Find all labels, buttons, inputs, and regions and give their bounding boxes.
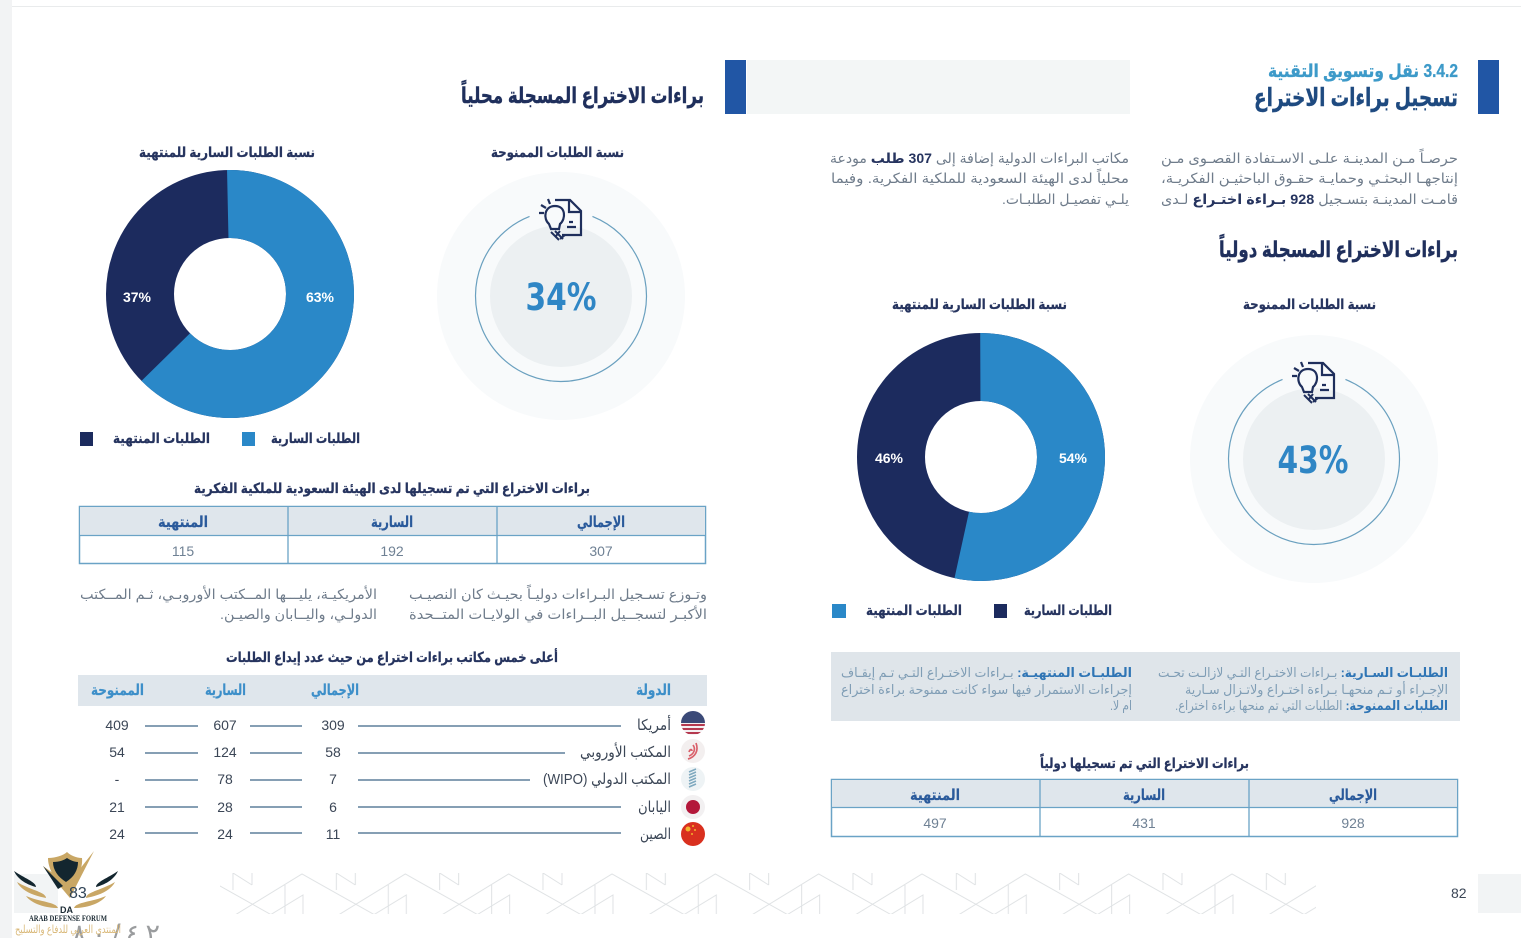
intro text right column: إنتاجهـا البحثـي وحمايـة حقـوق الباحثيـن الفكريـة، bbox=[1161, 170, 1458, 187]
forum watermark logo: المنتدى العربي للدفاع والتسليح bbox=[15, 924, 121, 936]
row: Japan: 6 bbox=[329, 799, 337, 815]
local totals table: الإجمالي bbox=[577, 514, 625, 531]
row: China: 11 bbox=[326, 826, 340, 842]
row: European office: 124 bbox=[213, 744, 237, 760]
international totals table: السارية bbox=[1123, 787, 1165, 804]
row: WIPO: 7 bbox=[329, 771, 337, 787]
local donut legend: الطلبات المنتهية bbox=[113, 430, 210, 447]
definitions callout bbox=[831, 652, 1460, 721]
page number tab bbox=[1478, 874, 1521, 913]
definitions right column bbox=[1158, 665, 1448, 714]
row: China: 24 bbox=[217, 826, 233, 842]
international expired value: 46% bbox=[875, 450, 904, 466]
intro text right column: قامـت المدينـة بتسـجيل 928 بـراءة اختـراع لـدى bbox=[1161, 191, 1458, 208]
row: China: الصين bbox=[640, 826, 671, 843]
grey header band bbox=[747, 60, 1130, 114]
local totals table: 307 bbox=[589, 543, 613, 559]
top five offices table bbox=[78, 675, 707, 846]
distribution text left column: الأمريكيـة، يليـــها المــكتب الأوروبـي، ثـم المــكتب bbox=[80, 585, 377, 603]
international totals table bbox=[831, 779, 1458, 837]
intro text left column: مكاتب البراءات الدولية إضافة إلى 307 طلب مودعة bbox=[830, 150, 1129, 167]
row: Japan: اليابان bbox=[638, 799, 671, 816]
local donut legend bbox=[80, 430, 360, 447]
local totals table bbox=[79, 506, 706, 564]
international totals table: 928 bbox=[1341, 815, 1365, 831]
row: USA: 607 bbox=[213, 717, 237, 733]
definitions right column: الطلبـات السـارية: بـراءات الاختـراع التـي لازالـت تحـت bbox=[1158, 665, 1448, 681]
page number: 82 bbox=[1451, 885, 1467, 901]
international donut legend: الطلبات السارية bbox=[1024, 602, 1112, 618]
icon: US flag bbox=[681, 711, 705, 735]
row: European office: المكتب الأوروبي bbox=[580, 742, 671, 762]
intro text left column: محلياً لدى الهيئة السعودية للملكية الفكرية. وفيما bbox=[831, 168, 1129, 187]
top five offices table: الإجمالي bbox=[311, 682, 359, 699]
local totals table: السارية bbox=[371, 514, 413, 531]
forum watermark logo: ARAB DEFENSE FORUM bbox=[29, 914, 107, 923]
row: China bbox=[109, 822, 705, 846]
distribution text right column: الأكبـر لتسجــيل البــراءات في الولايـات المتــحدة bbox=[409, 605, 707, 623]
top page edge bbox=[12, 6, 1521, 7]
international status donut chart bbox=[875, 296, 1088, 547]
definitions left column: ام لا. bbox=[1110, 698, 1132, 713]
icon: patent bulb document bbox=[539, 199, 581, 240]
row: Japan: 21 bbox=[109, 799, 125, 815]
international granted title: نسبة الطلبات الممنوحة bbox=[1243, 296, 1376, 313]
distribution text left column bbox=[80, 585, 377, 623]
local totals table: 192 bbox=[380, 543, 404, 559]
row: WIPO: المكتب الدولي (WIPO) bbox=[543, 771, 671, 789]
intro text left column: يلـي تفصيـل الطلبـات. bbox=[1002, 191, 1129, 208]
local donut title: نسبة الطلبات السارية للمنتهية bbox=[139, 144, 315, 161]
section marker bar bbox=[1478, 60, 1499, 114]
row: Japan: 28 bbox=[217, 799, 233, 815]
row: USA: أمريكا bbox=[637, 715, 671, 734]
row: USA bbox=[105, 711, 705, 735]
international granted ratio panel bbox=[1190, 296, 1438, 583]
international running value: 54% bbox=[1059, 450, 1088, 466]
international donut legend bbox=[832, 602, 1112, 619]
international totals table: الإجمالي bbox=[1329, 787, 1377, 804]
distribution text right column bbox=[409, 584, 707, 623]
local running value: 63% bbox=[306, 289, 335, 305]
international donut title: نسبة الطلبات السارية للمنتهية bbox=[892, 296, 1067, 313]
icon: patent bulb document bbox=[1292, 362, 1334, 403]
row: European office bbox=[109, 739, 705, 763]
row: USA: 409 bbox=[105, 717, 129, 733]
intro text left column bbox=[830, 150, 1129, 208]
row: European office: 54 bbox=[109, 744, 125, 760]
icon: Japan flag bbox=[681, 795, 705, 819]
local totals table: 115 bbox=[172, 543, 194, 559]
icon: China flag bbox=[681, 822, 705, 846]
row: USA: 309 bbox=[321, 717, 345, 733]
top five offices table: السارية bbox=[205, 682, 246, 699]
forum watermark logo: 83 bbox=[69, 885, 87, 902]
top five offices table: الدولة bbox=[636, 682, 671, 699]
icon: European office emblem bbox=[681, 739, 705, 763]
top five offices table: الممنوحة bbox=[91, 682, 144, 699]
international totals table: 497 bbox=[923, 815, 947, 831]
local granted title: نسبة الطلبات الممنوحة bbox=[491, 144, 624, 161]
local donut legend: الطلبات السارية bbox=[271, 430, 360, 446]
international granted percentage: 43% bbox=[1278, 439, 1348, 482]
local expired value: 37% bbox=[123, 289, 152, 305]
row: European office: 58 bbox=[325, 744, 341, 760]
intro text right column bbox=[1161, 148, 1458, 208]
local section heading: براءات الاختراع المسجلة محلياً bbox=[461, 79, 704, 109]
local section marker bar bbox=[725, 60, 746, 114]
local status donut chart bbox=[123, 144, 335, 386]
row: WIPO bbox=[115, 767, 705, 791]
international donut legend: الطلبات المنتهية bbox=[866, 602, 962, 619]
left page edge strip bbox=[0, 0, 12, 938]
distribution text right column: وتـوزع تسـجيل البـراءات دوليـاً بحيـث كان النصيـب bbox=[409, 584, 707, 603]
forum watermark logo bbox=[14, 851, 160, 938]
row: WIPO: - bbox=[115, 771, 120, 787]
definitions left column: إجراءات الاستمرار فيها سواء كانت ممنوحة براءة اختراع bbox=[841, 682, 1132, 698]
top five offices title: أعلى خمس مكاتب براءات اختراع من حيث عدد إيداع الطلبات bbox=[226, 648, 558, 666]
international table title: براءات الاختراع التي تم تسجيلها دولياً bbox=[1040, 753, 1249, 772]
row: WIPO: 78 bbox=[217, 771, 233, 787]
definitions right column: الطلبات الممنوحة: الطلبات التي تم منحها براءة اختراع. bbox=[1175, 698, 1448, 714]
international totals table: المنتهية bbox=[910, 787, 960, 804]
section number heading: 3.4.2 نقل وتسويق التقنية bbox=[1268, 61, 1458, 82]
row: China: 24 bbox=[109, 826, 125, 842]
row: Japan bbox=[109, 795, 705, 819]
international totals table: 431 bbox=[1132, 815, 1156, 831]
definitions right column: الإجـراء أو تـم منحهـا بـراءة اختـراع ولاتـزال سـارية bbox=[1185, 681, 1448, 698]
local table title: براءات الاختراع التي تم تسجيلها لدى الهيئة السعودية للملكية الفكرية bbox=[194, 480, 590, 497]
intro text right column: حرصـاً مـن المدينـة علـى الاسـتفادة القصـوى مـن bbox=[1161, 148, 1458, 167]
distribution text left column: الدولـي، واليــابان والصيـن. bbox=[220, 606, 377, 623]
forum watermark logo: DA bbox=[60, 905, 73, 915]
definitions left column: الطلبـات المنتهيـة: بـراءات الاختـراع التـي تـم إيقـاف bbox=[841, 665, 1132, 681]
icon: WIPO emblem bbox=[681, 767, 705, 791]
local granted percentage: 34% bbox=[526, 276, 596, 319]
local totals table: المنتهية bbox=[158, 514, 208, 531]
local granted ratio panel bbox=[437, 144, 685, 420]
definitions left column bbox=[841, 665, 1132, 713]
